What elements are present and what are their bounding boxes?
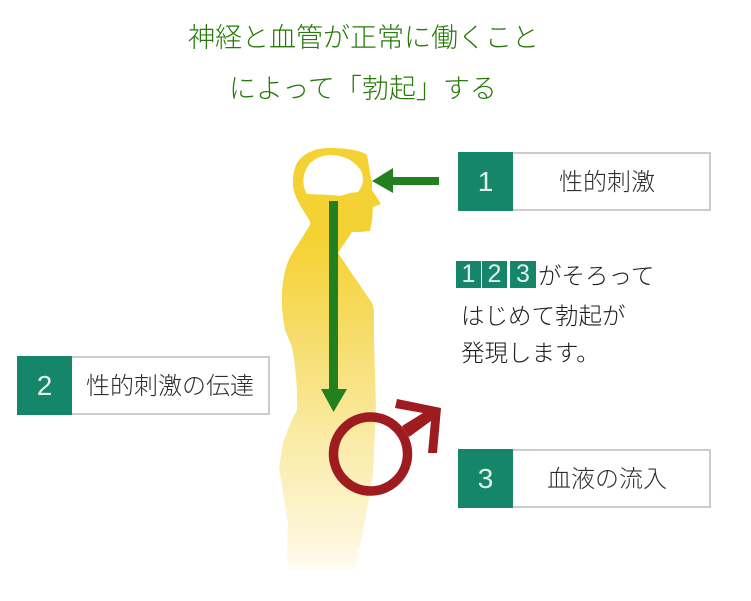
label box 3 [458,449,711,508]
number 2: 2 [37,370,52,401]
male symbol [334,399,441,491]
title line 1: 神経と血管が正常に働くこと [188,23,539,53]
body silhouette [279,148,381,570]
number 2 [17,356,72,415]
label text: blood inflow: 血液の流入 [547,466,667,493]
brain [303,155,363,196]
label box 2 [17,356,270,415]
arrow: nerve signal downward [321,201,347,412]
explanation line 2: はじめて勃起が [461,303,626,329]
badge 2 [482,261,507,288]
explanation line 3: 発現します。 [461,340,600,366]
number 1 [458,152,513,211]
badge 2: 2 [488,260,501,288]
number 3: 3 [478,463,493,494]
label text: transmission of stimulus: 性的刺激の伝達 [86,373,254,400]
badge 3: 3 [516,260,530,288]
arrow: stimulus to brain [372,168,439,193]
badge 3 [510,261,536,288]
label text: sexual stimulus: 性的刺激 [559,169,655,196]
badge 1: 1 [462,260,475,288]
number 1: 1 [478,166,493,197]
explanation line 1: がそろって [538,263,654,289]
title line 2: によって「勃起」する [229,74,497,104]
badge 1 [456,261,481,288]
label box 1 [458,152,711,211]
number 3 [458,449,513,508]
